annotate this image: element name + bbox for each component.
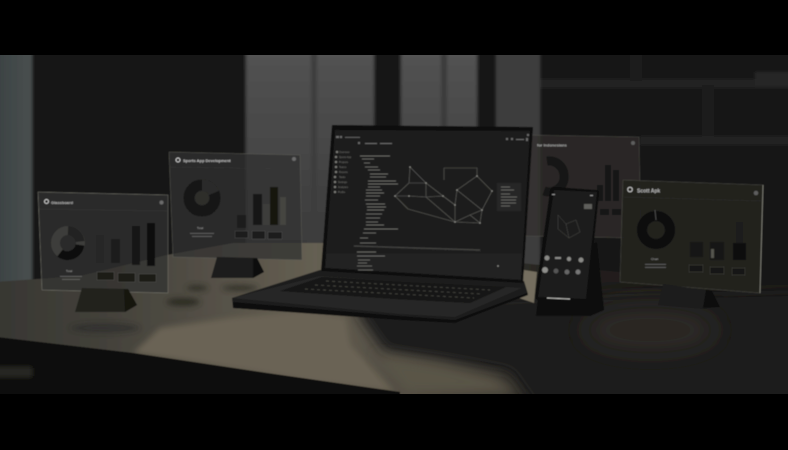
phone graph	[558, 215, 580, 238]
donut caption	[645, 257, 666, 268]
bar chart	[237, 187, 286, 228]
donut caption: Total	[66, 269, 73, 273]
donut chart	[544, 161, 564, 192]
phone	[535, 187, 599, 302]
donut caption: Chart	[651, 257, 659, 261]
desk front edge	[0, 335, 400, 410]
legend box	[497, 183, 521, 211]
sidebar: Analytics	[338, 186, 349, 189]
donut chart	[56, 230, 80, 256]
bar chart	[597, 165, 621, 215]
keyboard	[280, 277, 506, 303]
desk surface	[0, 243, 788, 420]
display stand right	[658, 284, 720, 309]
phone home bar	[547, 298, 570, 299]
buttons	[235, 231, 282, 239]
network diagram	[395, 167, 492, 223]
phone stand	[536, 242, 604, 316]
sidebar: Profile	[338, 191, 346, 194]
sidebar: Tasks	[339, 176, 346, 179]
phone status bar	[552, 194, 593, 196]
sidebar: Sports App	[339, 156, 352, 159]
settings icon	[160, 200, 164, 204]
sidebar: Overview	[339, 151, 350, 154]
screen top toolbar	[336, 134, 529, 144]
network nodes	[394, 166, 499, 267]
lower code lines	[357, 252, 385, 270]
panel title	[628, 187, 660, 194]
stand shadows on desk	[70, 286, 258, 333]
laptop screen	[321, 125, 533, 283]
phone badge	[584, 204, 592, 209]
panel title: for Indonesians	[537, 142, 568, 148]
light pool on desk	[133, 312, 395, 392]
bar chart	[690, 222, 746, 260]
code tree	[360, 156, 398, 243]
divider bar	[354, 246, 480, 250]
phone app icons row two	[542, 267, 580, 274]
settings icon	[292, 157, 296, 161]
panel title: Scott Apk	[637, 188, 660, 194]
glass panel: Sports App Development	[169, 152, 302, 260]
sidebar: Teams	[339, 166, 347, 169]
donut caption: Total	[197, 226, 204, 230]
sidebar: Projects	[339, 161, 349, 164]
donut chart	[189, 185, 215, 211]
settings icon	[754, 191, 758, 195]
laptop shadow on desk	[352, 290, 788, 420]
laptop base	[232, 270, 528, 323]
glass panel: Scott Apk	[620, 180, 763, 293]
sidebar: Settings	[338, 181, 348, 184]
buttons	[689, 265, 745, 275]
panel title: Sports App Development	[183, 158, 231, 163]
bar chart	[96, 223, 155, 266]
settings icon	[631, 141, 635, 145]
panel title: Glassboard	[51, 200, 74, 205]
display stand center	[211, 257, 264, 278]
light sliver between laptop and phone	[519, 270, 537, 303]
display stand left	[75, 288, 137, 312]
buttons	[97, 272, 156, 282]
laptop	[232, 125, 533, 323]
background: blurred room wall and windows	[0, 45, 788, 305]
sidebar: Reports	[339, 171, 349, 174]
phone app icons row one	[544, 256, 584, 262]
donut chart	[642, 210, 670, 244]
glass panel: for Indonesians	[525, 135, 641, 238]
glass panel: Glassboard	[38, 192, 168, 293]
sidebar	[334, 151, 352, 194]
right desk glow	[580, 308, 720, 352]
light glow near bottom edge	[375, 354, 520, 394]
